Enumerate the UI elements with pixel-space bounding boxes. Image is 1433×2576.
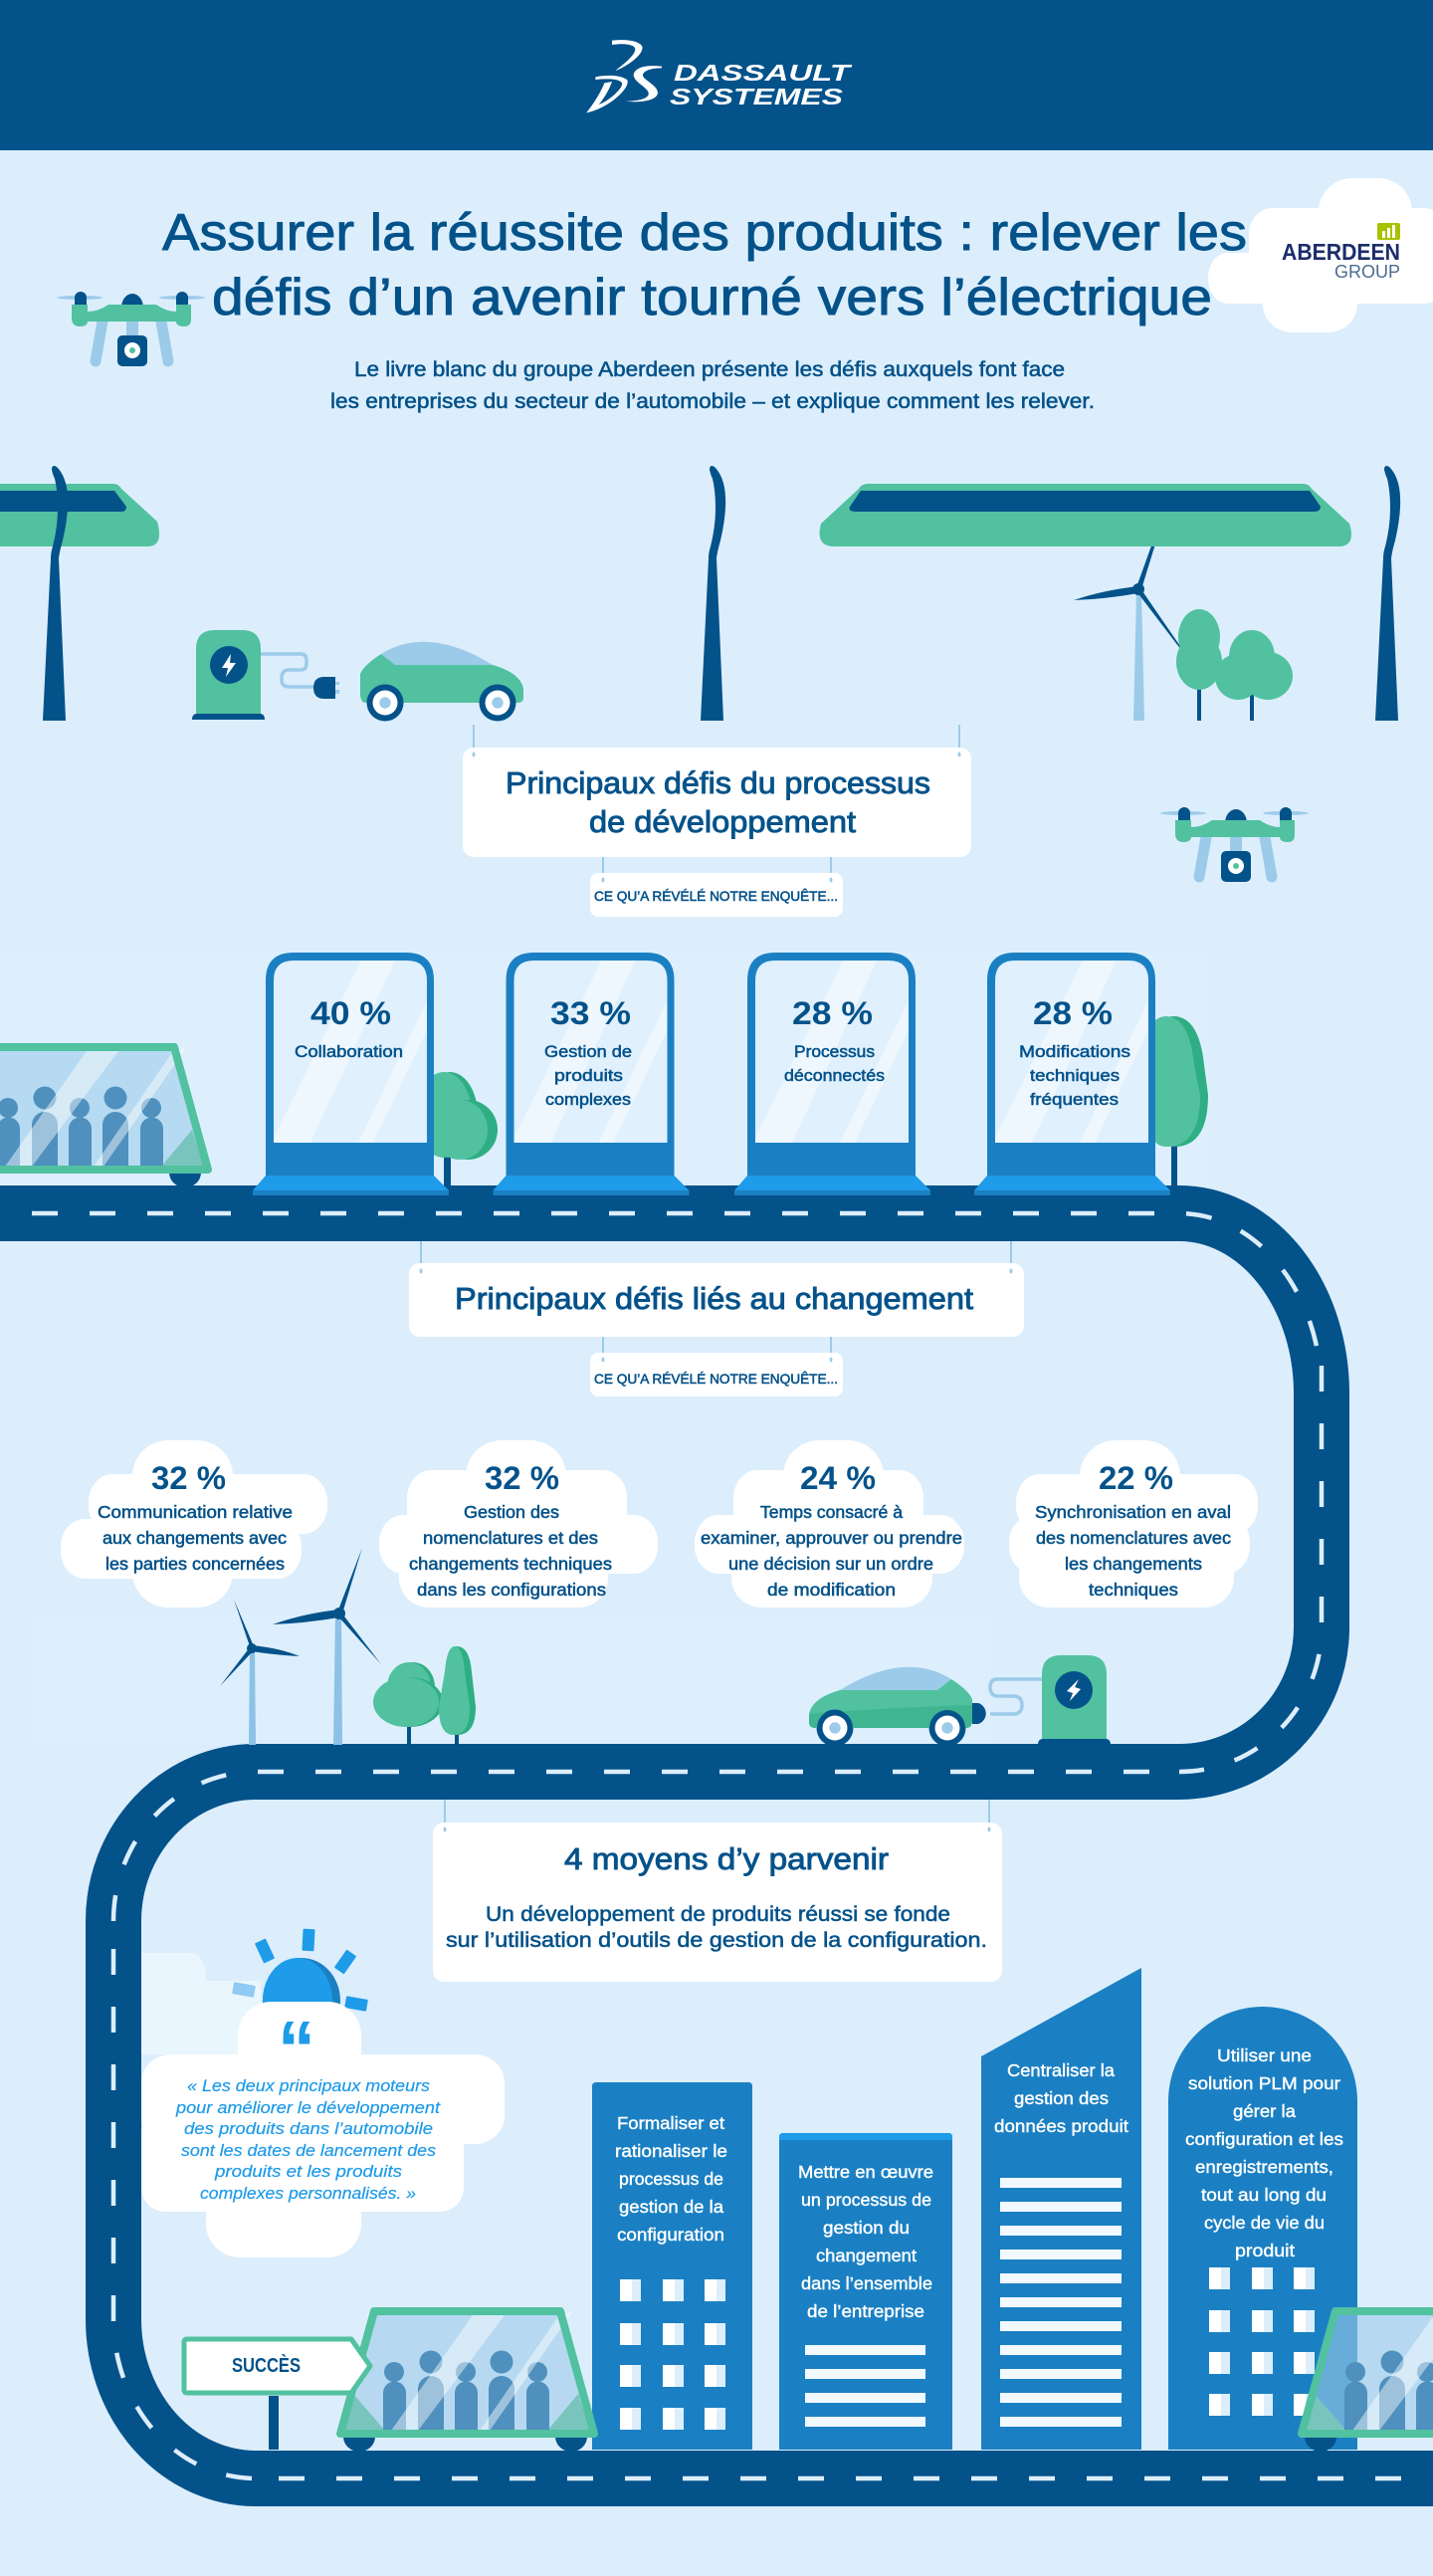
trees top right [1176, 609, 1293, 721]
building 2: de l’entreprise [807, 2301, 924, 2321]
stat sign: 40 %: 40 % [310, 995, 391, 1031]
cloud stat: 32 % nomenclatures: nomenclatures et des [423, 1528, 598, 1548]
title: défis d’un avenir tourné vers l’électrique [212, 269, 1212, 326]
building 1: configuration [617, 2225, 724, 2245]
stat sign: 33 %: complexes [545, 1090, 631, 1109]
stat sign: 33 %: produits [554, 1066, 623, 1085]
cloud stat: 32 % communication [61, 1440, 327, 1608]
bus bottom centre [340, 2311, 594, 2452]
building 2: Mettre en œuvre [798, 2162, 933, 2182]
title: Assurer la réussite des produits : relever les [162, 204, 1247, 262]
building 1: processus de [619, 2169, 723, 2189]
quote text: des produits dans l’automobile [184, 2120, 433, 2138]
building 4: gérer la [1233, 2101, 1296, 2121]
panel: 4 ways: Un développement de produits réussi se fonde [486, 1902, 950, 1926]
quote text: sont les dates de lancement des [181, 2142, 436, 2160]
building 2: dans l’ensemble [801, 2273, 932, 2293]
stat sign: 40 % [253, 953, 449, 1195]
bus bottom right [1302, 2311, 1433, 2452]
building 4: cycle de vie du [1204, 2213, 1325, 2233]
building 4: produit [1235, 2241, 1295, 2260]
building 1: Formaliser et [617, 2113, 724, 2133]
building 2: gestion du [823, 2218, 910, 2238]
cloud stat: 22 % synchronisation: 22 % [1099, 1460, 1173, 1496]
panel: change challenges: Principaux défis liés au changement [455, 1281, 973, 1316]
cloud stat: 22 % synchronisation: des nomenclatures avec [1036, 1528, 1231, 1548]
logo cloud: Aberdeen Group: GROUP [1334, 262, 1400, 282]
stat sign: 28 % modifications: techniques [1030, 1066, 1120, 1085]
cloud stat: 22 % synchronisation: les changements [1065, 1554, 1202, 1574]
stat sign: 40 %: Collaboration [295, 1042, 403, 1061]
cloud stat: 32 % nomenclatures: 32 % [485, 1460, 559, 1496]
charging station 1 [192, 630, 339, 720]
charging station 2 [990, 1655, 1111, 1745]
panel: change challenges [409, 1241, 1024, 1337]
quote cloud [141, 2002, 505, 2257]
cloud stat: 32 % nomenclatures [379, 1440, 658, 1608]
subtitle: les entreprises du secteur de l’automobile – et explique comment les relever. [330, 390, 1095, 413]
subtitle: Le livre blanc du groupe Aberdeen présente les défis auxquels font face [354, 358, 1065, 381]
canopy left [0, 484, 159, 546]
icon: drone left [57, 292, 205, 366]
quote text [175, 2077, 442, 2203]
logo: Dassault Systèmes [586, 40, 853, 112]
building 4: configuration et les [1185, 2129, 1343, 2149]
building 1: gestion de la [619, 2197, 723, 2217]
stat sign: 33 %: Gestion de [544, 1042, 632, 1061]
building 1: rationaliser le [615, 2141, 727, 2161]
tree behind first sign [416, 1072, 498, 1185]
success road sign: SUCCÈS [232, 2354, 301, 2377]
building 3: données produit [994, 2116, 1128, 2136]
cloud stat: 22 % synchronisation: Synchronisation en aval [1035, 1502, 1231, 1522]
building 2: changement [816, 2246, 917, 2265]
panel: 4 ways: 4 moyens d’y parvenir [564, 1841, 889, 1876]
street lamps [43, 466, 1400, 721]
trees middle [373, 1646, 476, 1745]
logo: Dassault Systèmes: DASSAULT [674, 60, 853, 86]
building 3: gestion des [1014, 2088, 1109, 2108]
pale cloud behind sun [141, 1953, 261, 2054]
cloud stat: 32 % communication: aux changements avec [102, 1528, 287, 1548]
building 1 [592, 2082, 752, 2450]
building 4: enregistrements, [1195, 2157, 1333, 2177]
quote text: « Les deux principaux moteurs [187, 2077, 430, 2095]
cloud stat: 32 % communication: 32 % [151, 1460, 226, 1496]
icon: drone right [1160, 807, 1309, 882]
cloud stat: 24 % time: examiner, approuver ou prendre [701, 1528, 962, 1548]
building 2: un processus de [801, 2190, 931, 2210]
bus top left [0, 1047, 208, 1187]
stat sign: 28 % processes [734, 953, 930, 1195]
stat sign: 33 % [494, 953, 689, 1195]
quote mark: “ [278, 2005, 315, 2093]
logo cloud: Aberdeen Group [1208, 178, 1433, 332]
panel: development challenges: Principaux défis du processus [506, 765, 930, 800]
panel: survey tag 2 [590, 1337, 843, 1396]
stat sign: 28 % modifications: fréquentes [1030, 1090, 1119, 1109]
panel: survey tag 1: CE QU’A RÉVÉLÉ NOTRE ENQUÊTE... [594, 888, 838, 904]
icon: sun [232, 1929, 368, 2043]
wind turbine right [1074, 537, 1184, 721]
logo: Dassault Systèmes: SYSTEMES [670, 84, 844, 109]
panel: development challenges [463, 725, 971, 857]
tree behind last sign [1144, 1016, 1208, 1185]
panel: survey tag 1 [590, 857, 843, 917]
quote text: produits et les produits [214, 2163, 402, 2181]
panel: development challenges: de développement [589, 804, 856, 839]
cloud stat: 24 % time: 24 % [800, 1460, 876, 1496]
road [0, 1213, 1433, 2478]
stat sign: 28 % processes: 28 % [792, 995, 873, 1031]
cloud stat: 24 % time [695, 1440, 964, 1608]
stat sign: 28 % modifications: 28 % [1033, 995, 1113, 1031]
electric car 1 [360, 642, 523, 721]
cloud stat: 32 % nomenclatures: changements techniques [409, 1554, 612, 1574]
stat sign: 28 % processes: Processus [794, 1042, 875, 1061]
building 3 [981, 1968, 1141, 2450]
canopy right [820, 484, 1351, 546]
stat sign: 28 % processes: déconnectés [784, 1066, 885, 1085]
panel: 4 ways: sur l’utilisation d’outils de gestion de la configuration. [446, 1928, 987, 1952]
wind turbine small [220, 1600, 300, 1745]
cloud stat: 32 % communication: les parties concernées [105, 1554, 285, 1574]
cloud stat: 24 % time: une décision sur un ordre [728, 1554, 933, 1574]
building 2 [779, 2133, 952, 2450]
cloud stat: 22 % synchronisation: techniques [1089, 1580, 1178, 1600]
electric car 2 [809, 1667, 986, 1746]
cloud stat: 22 % synchronisation [1009, 1440, 1258, 1608]
title [162, 204, 1247, 326]
stat sign: 28 % modifications: Modifications [1019, 1042, 1130, 1061]
building 4 [1168, 2007, 1357, 2450]
stat sign: 28 % modifications [974, 953, 1170, 1195]
wind turbine large [273, 1548, 381, 1745]
panel: 4 ways [433, 1800, 1002, 1982]
cloud stat: 32 % nomenclatures: Gestion des [464, 1502, 559, 1522]
quote text: complexes personnalisés. » [200, 2185, 416, 2203]
building 4: solution PLM pour [1188, 2073, 1340, 2093]
quote text: pour améliorer le développement [175, 2099, 442, 2117]
cloud stat: 24 % time: Temps consacré à [760, 1502, 903, 1522]
stat sign: 33 %: 33 % [550, 995, 631, 1031]
subtitle [330, 358, 1095, 413]
building 4: Utiliser une [1217, 2045, 1312, 2065]
building 4: tout au long du [1201, 2185, 1327, 2205]
cloud stat: 32 % communication: Communication relative [98, 1502, 293, 1522]
header band [0, 0, 1433, 150]
panel: survey tag 2: CE QU’A RÉVÉLÉ NOTRE ENQUÊTE... [594, 1371, 838, 1387]
cloud stat: 32 % nomenclatures: dans les configurations [417, 1580, 606, 1600]
success road sign [184, 2339, 370, 2450]
building 3: Centraliser la [1007, 2060, 1115, 2080]
logo cloud: Aberdeen Group: ABERDEEN [1282, 239, 1400, 265]
cloud stat: 24 % time: de modification [767, 1580, 896, 1600]
